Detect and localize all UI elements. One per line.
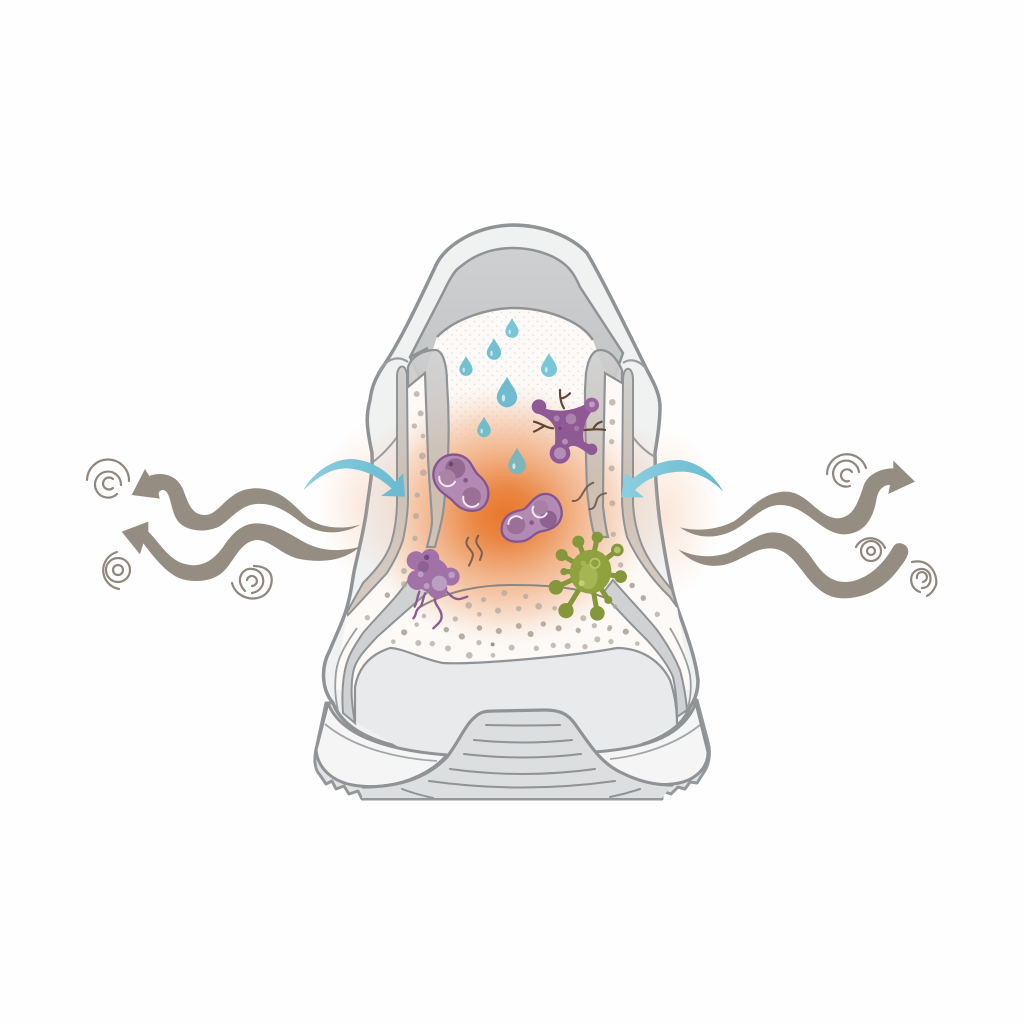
odour arrow lower left [122, 522, 360, 581]
perforation dots [385, 391, 646, 639]
panel line left [335, 628, 357, 710]
shoe [315, 225, 709, 799]
lining band left upper [408, 350, 449, 547]
odour squiggles centre [466, 536, 482, 566]
narrow strap right [622, 369, 677, 607]
midsole right [595, 703, 708, 785]
odour swirl 5 [856, 538, 885, 561]
droplet 6 [477, 417, 491, 437]
odour swirl 1 [87, 459, 129, 498]
insole top edge [410, 308, 593, 357]
odour swirl 4 [827, 454, 866, 487]
ear flap line left lower [372, 437, 397, 463]
bacterium: left peanut [433, 455, 488, 511]
insole floor arc [420, 585, 610, 607]
interior base [335, 308, 692, 690]
midsole detail line right [610, 725, 700, 759]
ear flap line right upper [623, 360, 647, 370]
bacterium: spiked purple [532, 390, 605, 464]
lining band left lower [342, 578, 428, 723]
droplet 5 [497, 377, 517, 407]
odour arrow upper right [680, 461, 915, 537]
odour swirl 3 [232, 566, 272, 599]
outsole with tread [315, 700, 709, 799]
incoming air arrow left [303, 459, 405, 497]
narrow strap left [347, 366, 408, 615]
insole speckle texture [437, 308, 600, 440]
shoe upper outline [324, 225, 698, 753]
amoeba with flagella [407, 549, 467, 628]
heat glow: right of shoe [610, 430, 720, 600]
incoming air arrow right [621, 460, 723, 497]
toe tab outline [363, 710, 672, 787]
midsole detail line left [325, 724, 437, 761]
ear flap line left upper [378, 358, 408, 373]
virus: green spiked [549, 532, 627, 621]
water droplets [459, 318, 557, 474]
toe box panel edge [355, 648, 677, 724]
interior heat gradient [335, 308, 692, 690]
ear flap line right lower [633, 437, 655, 457]
odour arrow lower right [678, 532, 908, 598]
odour swirl 6 [911, 561, 936, 596]
microbes [407, 390, 627, 628]
droplet 1 [505, 318, 519, 338]
panel line right [670, 628, 691, 707]
odour swirl 2 [103, 552, 130, 589]
collar grey heel panel [410, 248, 623, 420]
warm wash over side panels [362, 435, 663, 561]
midsole left [316, 703, 447, 787]
toe tab ribs [402, 725, 640, 798]
heat glow: left of shoe [318, 425, 418, 585]
bacterium: centre peanut [502, 494, 562, 542]
toe box panel fill [355, 648, 677, 765]
lining band right lower [603, 580, 687, 717]
droplet 3 [459, 356, 473, 376]
droplet 7 [508, 448, 526, 474]
toe tab fill [362, 710, 672, 798]
perforation dots lower floor [365, 583, 660, 659]
odour arrow upper left [132, 469, 361, 532]
droplet 4 [541, 353, 557, 377]
odour squiggles right [573, 483, 606, 509]
illustration: shoe with microbes and odour [86, 223, 938, 800]
droplet 2 [487, 338, 501, 360]
lining band right upper [585, 350, 622, 537]
